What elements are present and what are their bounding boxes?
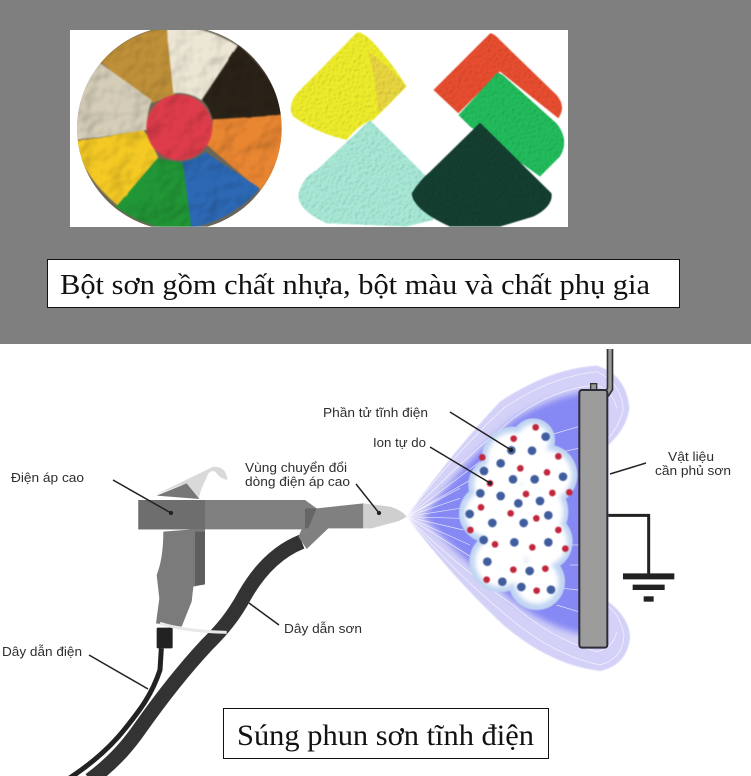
panel: powder samples background [0, 0, 751, 344]
caption: powder composition: Bột sơn gồm chất nhựa, bột màu và chất phụ gia [60, 270, 651, 301]
trigger [155, 467, 227, 499]
pointer lines [89, 412, 646, 689]
barrel [138, 500, 363, 549]
caption: spray gun: Súng phun sơn tĩnh điện [237, 719, 534, 752]
label: high voltage: Điện áp cao [11, 471, 84, 485]
target plate with wire [579, 349, 610, 648]
caption: spray gun [224, 708, 548, 758]
charged particle cloud [459, 418, 577, 610]
blue particles [465, 432, 567, 594]
label: power cable: Dây dẫn điện [2, 644, 82, 659]
white strap [160, 623, 227, 632]
label: conversion zone: dòng điện áp cao [245, 475, 350, 489]
color wheel of powders [73, 25, 285, 231]
label: conversion zone [245, 461, 350, 489]
handle [156, 528, 205, 627]
red particles [467, 424, 573, 594]
label: target material [655, 450, 731, 478]
paint hose [90, 542, 302, 776]
label: conversion zone: Vùng chuyển đổi [245, 461, 347, 475]
caption: powder composition [48, 260, 680, 308]
label: target material: Vật liệu [668, 450, 714, 464]
power cable [67, 628, 173, 776]
ground symbol [608, 515, 674, 599]
field lobes around target [407, 366, 630, 671]
photo: powder samples [70, 25, 568, 231]
spray gun [67, 467, 407, 776]
field lines [407, 372, 624, 665]
label: paint hose: Dây dẫn sơn [284, 621, 362, 636]
label: target material: cần phủ sơn [655, 464, 731, 478]
nozzle [363, 503, 407, 528]
label: electrostatic particle: Phần tử tĩnh điện [323, 406, 428, 420]
label: free ions: Ion tự do [373, 436, 426, 450]
powder piles [291, 32, 564, 227]
